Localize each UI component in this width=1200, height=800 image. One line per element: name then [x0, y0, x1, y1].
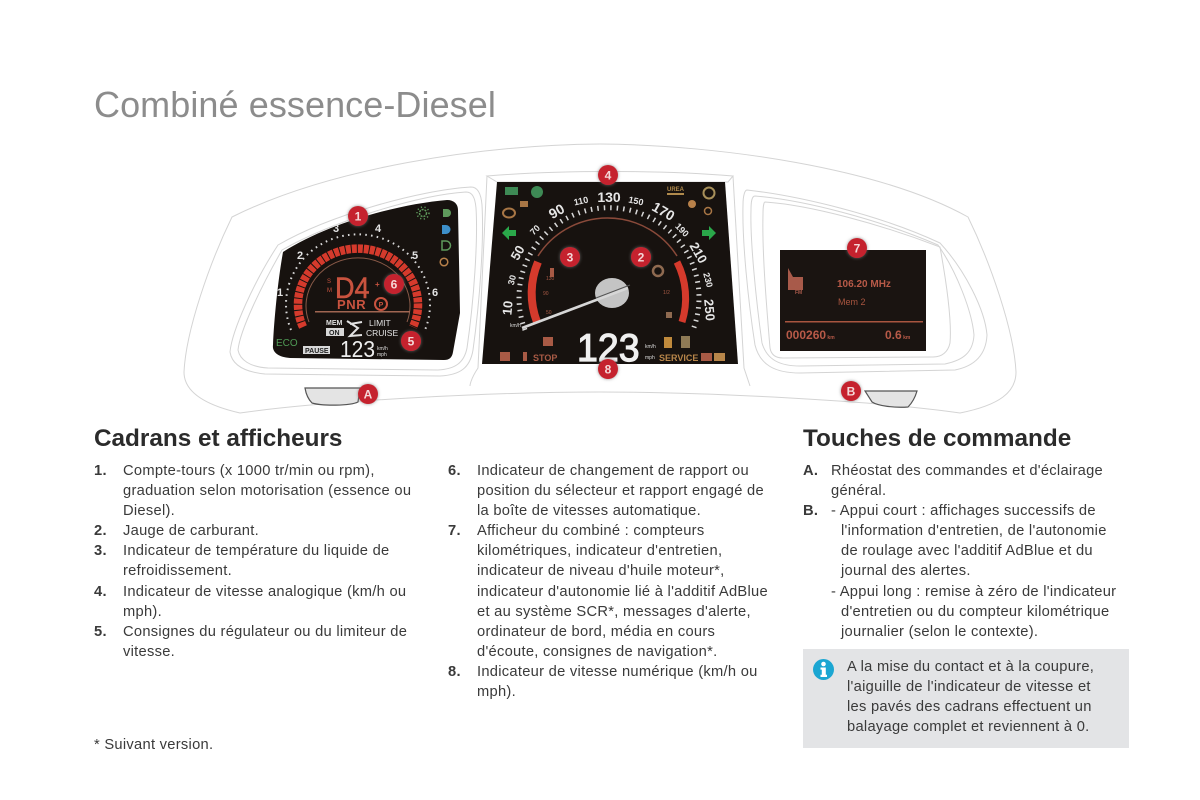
ECO label: ECO [276, 338, 298, 349]
speed numbers: 90 [546, 200, 567, 222]
rev counter numbers: 1 [277, 287, 283, 299]
badge 7: 7 [854, 242, 861, 256]
left cluster black panel [273, 200, 460, 360]
speed numbers: 150 [628, 195, 644, 207]
gauge small icons [543, 266, 672, 318]
text column 1: 5. [94, 624, 107, 640]
gear indicator D4 [327, 272, 387, 312]
text column 1: 3. [94, 543, 107, 559]
radio icon: FM [795, 290, 802, 296]
fuel gauge band [677, 262, 686, 322]
center cluster: speedometer: km/h [645, 344, 656, 350]
gear indicator D4: M [327, 288, 332, 294]
text column 2: ordinateur de bord, média en cours [477, 624, 715, 640]
cruise and limit display [326, 318, 398, 338]
text column 2: Indicateur de vitesse numérique (km/h ou [477, 664, 758, 680]
rev counter numbers: 2 [297, 250, 303, 262]
needle and hub [522, 278, 630, 328]
text column 3: l'information d'entretien, de l'autonomie [841, 523, 1107, 539]
speed numbers [499, 189, 718, 321]
cruise and limit display: LIMIT [369, 318, 391, 328]
text column 2: 8. [448, 664, 461, 680]
text column 3: - Appui court : affichages successifs de [831, 503, 1096, 519]
left turn arrow [502, 226, 516, 240]
text column 2: position du sélecteur et rapport engagé de [477, 483, 764, 499]
title: Combiné essence-Diesel [94, 84, 496, 125]
badge 5 [401, 331, 421, 351]
text column 1: refroidissement. [123, 563, 232, 579]
digital speed readout: 123 [577, 326, 640, 370]
cruise and limit display: ON [329, 330, 340, 337]
gear indicator D4: D4 [335, 272, 370, 305]
text column 1: 4. [94, 584, 107, 600]
rev counter red band [298, 249, 418, 327]
text column 1: 2. [94, 523, 107, 539]
gauge small icons: 130 [546, 276, 555, 282]
text column 1 [94, 463, 411, 660]
text column 1: Consignes du régulateur ou du limiteur de [123, 624, 407, 640]
rev counter numbers: 3 [333, 223, 339, 235]
text column 2: 7. [448, 523, 461, 539]
rev counter numbers: 4 [375, 223, 382, 235]
bottom right warnings: SERVICE [659, 353, 698, 363]
gauge small icons: 90 [543, 291, 549, 297]
cruise and limit display: CRUISE [366, 328, 398, 338]
radio icon [788, 268, 803, 296]
right display screen [780, 250, 926, 351]
bottom left warnings [500, 337, 557, 363]
callout text [847, 659, 1094, 735]
gear indicator D4: + [375, 280, 380, 289]
left cluster: rev counter: km/h [377, 346, 388, 352]
text column 1: graduation selon motorisation (essence ou [123, 483, 411, 499]
badge 3 [560, 247, 580, 267]
rev counter dotted scale [286, 234, 430, 330]
callout text: balayage complet et reviennent à 0. [847, 719, 1090, 735]
button B [865, 391, 917, 407]
pause label [303, 346, 330, 355]
text column 1: vitesse. [123, 644, 175, 660]
text column 1: 1. [94, 463, 107, 479]
text column 2: indicateur d'autonomie lié à l'additif AdBlue [477, 584, 768, 600]
cruise speed readout: 123 [340, 336, 375, 362]
text column 1: Compte-tours (x 1000 tr/min ou rpm), [123, 463, 375, 479]
text column 3: général. [831, 483, 886, 499]
badge 1: 1 [355, 210, 362, 224]
text column 3: B. [803, 503, 818, 519]
warning icons top left [503, 186, 543, 218]
dashboard outer casing [184, 144, 1016, 413]
text column 3: A. [803, 463, 818, 479]
text column 2: indicateur de niveau d'huile moteur*, [477, 563, 724, 579]
rev counter numbers: 5 [412, 250, 418, 262]
text column 2: kilométriques, indicateur d'entretien, [477, 543, 722, 559]
badge 4 [598, 165, 618, 185]
text column 1: Indicateur de température du liquide de [123, 543, 390, 559]
badge 8: 8 [605, 362, 612, 376]
text column 2: 6. [448, 463, 461, 479]
bottom right warnings [659, 336, 725, 363]
button A [305, 388, 360, 405]
text column 3: Rhéostat des commandes et d'éclairage [831, 463, 1103, 479]
badge A: A [364, 388, 373, 402]
badge B [841, 381, 861, 401]
badge 8 [598, 359, 618, 379]
speed numbers: 130 [597, 189, 621, 205]
bottom left warnings: STOP [533, 353, 557, 363]
center cluster: speedometer [482, 182, 738, 370]
speed numbers: 230 [701, 271, 715, 289]
warning icons top right: UREA [667, 187, 685, 193]
lighting warning icons [417, 207, 451, 266]
radio frequency: 106.20 MHz [837, 279, 891, 290]
callout text: l'aiguille de l'indicateur de vitesse et [847, 679, 1091, 695]
speed numbers: 110 [573, 195, 589, 207]
speed numbers: 210 [687, 240, 710, 266]
text column 2: Indicateur de changement de rapport ou [477, 463, 749, 479]
text column 1: Jauge de carburant. [123, 523, 259, 539]
center cluster: speedometer: km/h [510, 323, 521, 329]
speed numbers: 190 [673, 221, 691, 239]
text column 3: d'entretien ou du compteur kilométrique [841, 604, 1109, 620]
badge B: B [847, 384, 856, 398]
badge A [358, 384, 378, 404]
rev counter numbers: 6 [432, 287, 438, 299]
text column 2: Afficheur du combiné : compteurs [477, 523, 704, 539]
text column 3: de roulage avec l'additif AdBlue et du [841, 543, 1093, 559]
speed numbers: 70 [528, 223, 542, 237]
speed numbers: 10 [499, 300, 516, 316]
thin inner arc [538, 218, 677, 256]
heading: Touches de commande: Touches de commande [803, 425, 1071, 452]
gauge small icons: 1/2 [663, 290, 670, 296]
text column 3 [803, 463, 1116, 640]
right turn arrow [702, 226, 716, 240]
icon: info [813, 659, 834, 680]
temperature gauge band [532, 262, 538, 322]
rev counter numbers [277, 223, 438, 299]
badge 5: 5 [408, 334, 415, 348]
badge 7 [847, 238, 867, 258]
center cluster black panel [482, 182, 738, 364]
left cluster: rev counter [273, 200, 460, 362]
text column 2: mph). [477, 684, 516, 700]
speed numbers: 250 [701, 298, 718, 321]
text column 2 [448, 463, 768, 700]
speed numbers: 170 [649, 198, 678, 224]
warning icons top right [667, 187, 714, 214]
text column 2: la boîte de vitesses automatique. [477, 503, 701, 519]
speedometer tick scale [519, 208, 699, 330]
callout text: les pavés des cadrans effectuent un [847, 699, 1092, 715]
text column 2: et au système SCR*, messages d'alerte, [477, 604, 751, 620]
callout text: A la mise du contact et à la coupure, [847, 659, 1094, 675]
text column 1: Diesel). [123, 503, 175, 519]
badge 2 [631, 247, 651, 267]
gear indicator D4: PNR [337, 297, 366, 312]
left cluster: rev counter: mph [377, 352, 387, 358]
text column 3: - Appui long : remise à zéro de l'indicateur [831, 584, 1116, 600]
speed numbers: 50 [507, 243, 528, 263]
gauge small icons: 50 [546, 310, 552, 316]
text column 1: Indicateur de vitesse analogique (km/h ou [123, 584, 406, 600]
text column 3: journal des alertes. [841, 563, 971, 579]
footnote: * Suivant version. [94, 737, 213, 753]
badge 4: 4 [605, 168, 612, 182]
gear indicator D4: P [379, 302, 384, 309]
dashboard diagram [184, 144, 1016, 414]
cruise and limit display: MEM [326, 320, 342, 327]
badge 1 [348, 206, 368, 226]
heading: Cadrans et afficheurs: Cadrans et afficheurs [94, 425, 342, 452]
center cluster: speedometer: mph [645, 355, 655, 361]
text column 1: mph). [123, 604, 162, 620]
text column 2: d'écoute, consignes de navigation*. [477, 644, 717, 660]
trip counter: 0.6 km [885, 328, 911, 342]
badge 2: 2 [638, 250, 645, 264]
badge 6: 6 [391, 278, 398, 292]
badge 3: 3 [567, 250, 574, 264]
speed numbers: 30 [506, 274, 518, 286]
pause label: PAUSE [305, 348, 329, 355]
odometer: 000260 km [786, 328, 835, 342]
badge 6 [384, 274, 404, 294]
memory label: Mem 2 [838, 297, 866, 307]
info callout [803, 649, 1129, 748]
gear indicator D4: S [327, 279, 331, 285]
text column 3: journalier (selon le contexte). [841, 624, 1038, 640]
